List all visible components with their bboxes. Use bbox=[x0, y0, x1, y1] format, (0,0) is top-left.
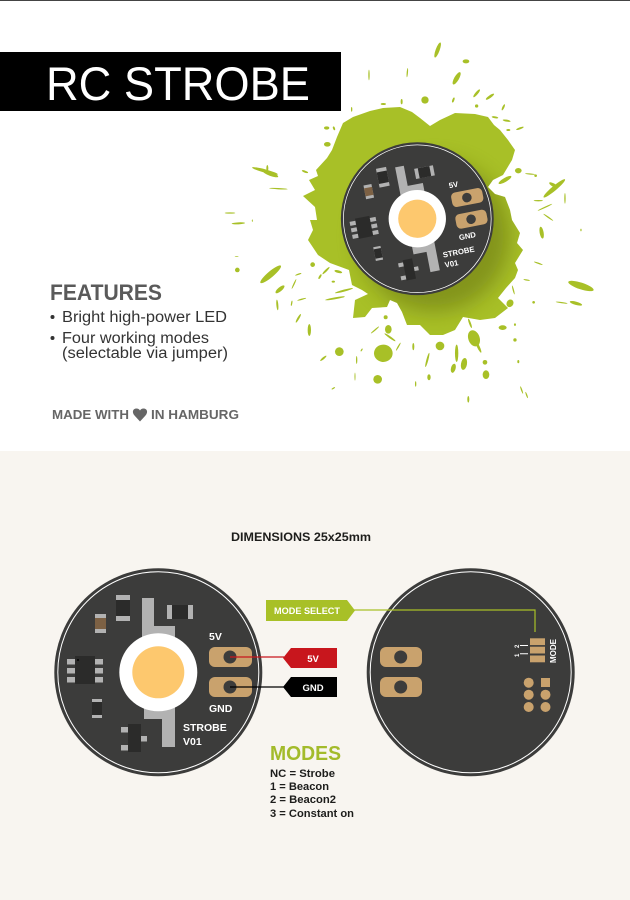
mode jumper: 1 bbox=[515, 653, 521, 657]
callout: GND: GND bbox=[302, 683, 324, 694]
callout: mode select bbox=[266, 600, 535, 632]
callout: mode select: MODE SELECT bbox=[274, 606, 340, 617]
credit line bbox=[52, 408, 239, 422]
solder pads bbox=[209, 647, 252, 697]
mode jumper: 2 bbox=[515, 644, 521, 648]
board labels: 5V bbox=[209, 631, 222, 643]
heading: features: FEATURES bbox=[50, 280, 162, 305]
mode jumper: MODE bbox=[549, 638, 558, 663]
credit line: MADE WITH bbox=[52, 408, 129, 422]
feature list: Bright high-power LED bbox=[62, 309, 227, 326]
copper trace bbox=[142, 598, 175, 747]
paint splat bbox=[225, 42, 595, 403]
modes list: 3 = Constant on bbox=[270, 808, 354, 820]
title: RC STROBE bbox=[46, 57, 310, 110]
feature list: Four working modes bbox=[62, 330, 209, 347]
solder pads bbox=[380, 647, 422, 697]
header pins bbox=[524, 678, 550, 712]
dimensions heading: DIMENSIONS 25x25mm bbox=[231, 530, 371, 544]
heading: modes: MODES bbox=[270, 743, 341, 765]
board: top illustration: V01 bbox=[444, 258, 460, 270]
mode jumper bbox=[515, 638, 558, 663]
callout: GND bbox=[230, 677, 337, 697]
panel: lower section background bbox=[0, 451, 630, 900]
board: back view bbox=[367, 568, 575, 776]
feature list bbox=[50, 309, 228, 362]
board labels bbox=[183, 631, 233, 748]
credit line: IN HAMBURG bbox=[151, 408, 239, 422]
board: top illustration: 5V bbox=[448, 179, 460, 190]
board: top illustration bbox=[328, 129, 507, 308]
feature list: (selectable via jumper) bbox=[62, 345, 228, 362]
board labels: GND bbox=[209, 703, 233, 715]
modes list: 1 = Beacon bbox=[270, 781, 329, 793]
board: top illustration: STROBE bbox=[442, 245, 475, 260]
components bbox=[67, 595, 193, 752]
LED bbox=[119, 633, 197, 711]
board: front view bbox=[54, 568, 262, 776]
callout: 5V bbox=[230, 648, 337, 668]
callout: 5V: 5V bbox=[307, 654, 319, 665]
board labels: V01 bbox=[183, 736, 202, 748]
board: top illustration: GND bbox=[458, 230, 477, 242]
modes list: 2 = Beacon2 bbox=[270, 794, 336, 806]
board labels: STROBE bbox=[183, 722, 227, 734]
modes list: NC = Strobe bbox=[270, 768, 335, 780]
top rule bbox=[0, 0, 630, 1]
modes list bbox=[270, 768, 354, 820]
